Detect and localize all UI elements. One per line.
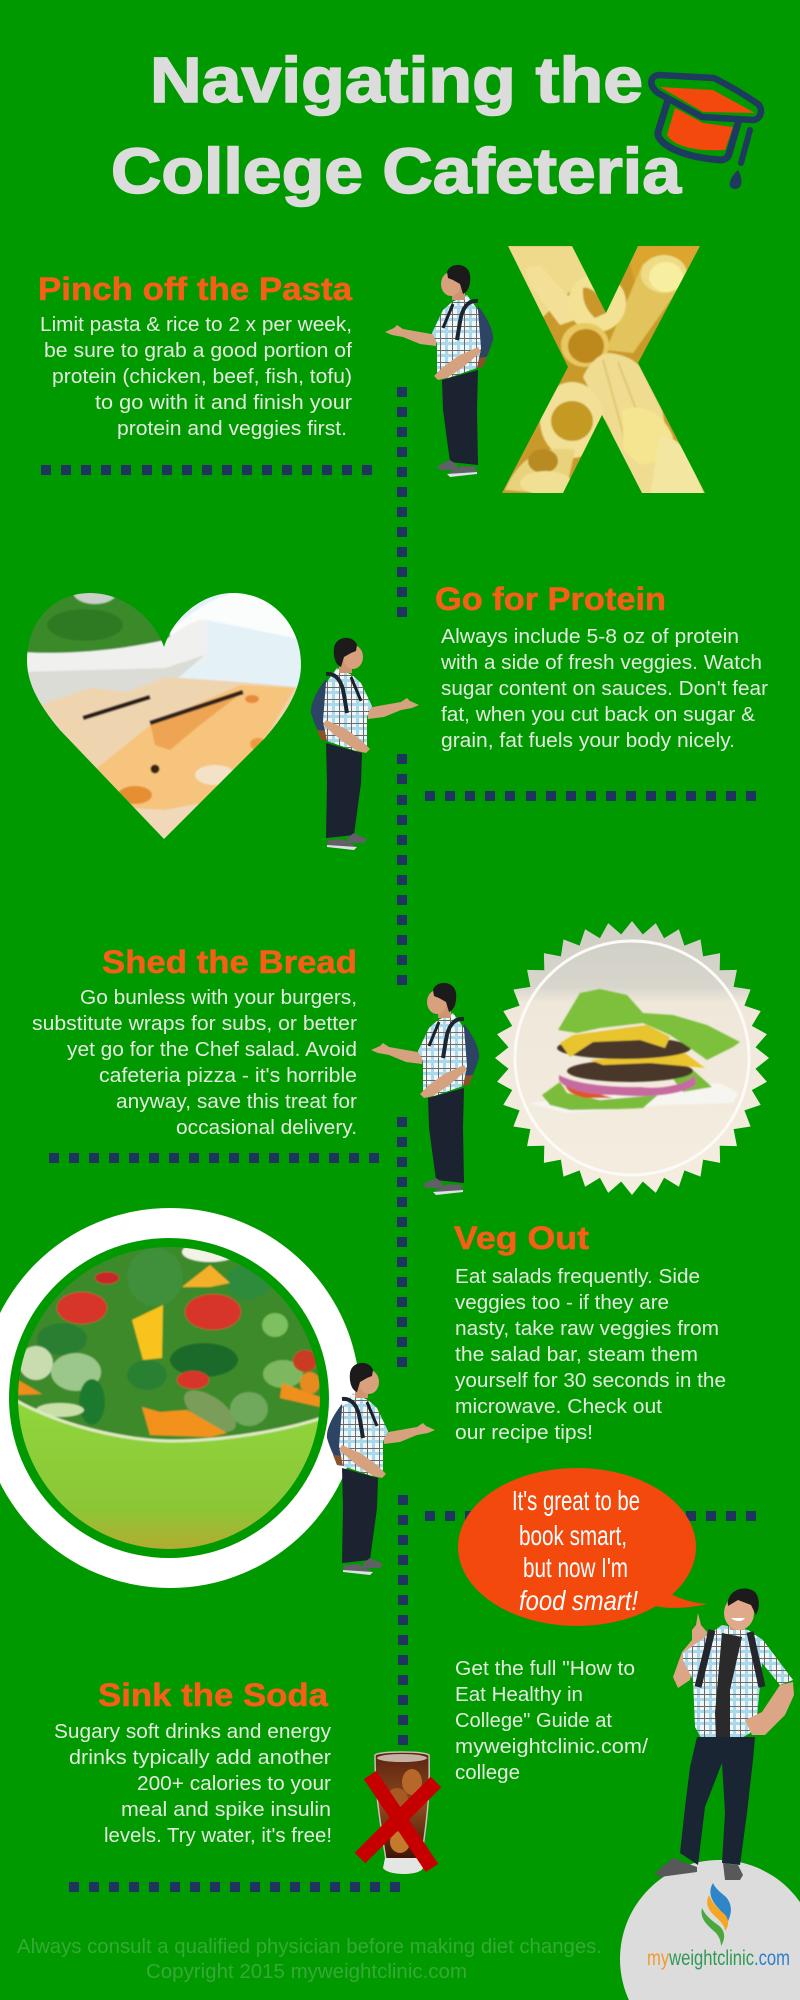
- text block: full guide link: Eat Healthy in: [455, 1684, 583, 1706]
- title: College Cafeteria: [111, 135, 681, 207]
- text block: bread advice: occasional delivery.: [176, 1117, 357, 1139]
- callout: speech bubble: [458, 1468, 707, 1626]
- figure: student pointing at pasta: [385, 265, 493, 477]
- figure: student pointing right toward protein text: [311, 638, 419, 850]
- dotted connector: third vertical: [397, 1117, 407, 1367]
- text block: veggie advice: the salad bar, steam them: [455, 1344, 698, 1366]
- footer disclaimer: Always consult a qualified physician before making diet changes.: [17, 1936, 602, 1958]
- title: Navigating the: [150, 44, 643, 116]
- text block: veggie advice: [455, 1266, 726, 1444]
- heading: Sink the Soda: Sink the Soda: [98, 1677, 328, 1713]
- photo: bunless burger in starburst: [495, 921, 769, 1195]
- callout: speech bubble: but now I'm: [523, 1552, 628, 1583]
- text block: full guide link: Get the full "How to: [455, 1658, 635, 1680]
- text block: soda advice: levels. Try water, it's free!: [104, 1825, 332, 1847]
- text block: full guide link: [455, 1658, 648, 1784]
- text block: pasta advice: Limit pasta & rice to 2 x per week,: [40, 314, 352, 336]
- heading: Go for Protein: Go for Protein: [435, 581, 666, 617]
- heading: Shed the Bread: Shed the Bread: [102, 944, 357, 980]
- text block: pasta advice: protein (chicken, beef, fish, tofu): [52, 366, 352, 388]
- text block: protein advice: Always include 5-8 oz of protein: [441, 626, 739, 648]
- text block: veggie advice: yourself for 30 seconds in the: [455, 1370, 726, 1392]
- text block: protein advice: sugar content on sauces. Don't fear: [441, 678, 768, 700]
- text block: soda advice: Sugary soft drinks and energy: [54, 1721, 331, 1743]
- text block: pasta advice: be sure to grab a good portion of: [44, 340, 352, 362]
- text block: protein advice: grain, fat fuels your body nicely.: [441, 730, 735, 752]
- text block: soda advice: [54, 1721, 332, 1847]
- text block: protein advice: [440, 626, 768, 752]
- dotted connector: fourth horizontal: [425, 1511, 756, 1521]
- logo badge: myweightclinic: [620, 1860, 800, 2000]
- text block: protein advice: fat, when you cut back on sugar &: [441, 704, 756, 726]
- text block: bread advice: substitute wraps for subs, or better: [32, 1013, 357, 1035]
- icon: crossed-out soda glass: [360, 1752, 436, 1874]
- text block: veggie advice: Eat salads frequently. Side: [455, 1266, 700, 1288]
- panel: shed the bread text: [32, 944, 357, 1139]
- text block: veggie advice: our recipe tips!: [455, 1422, 593, 1444]
- callout: speech bubble: food smart!: [519, 1585, 638, 1616]
- figure: student pointing left toward bread text: [371, 983, 479, 1195]
- figure: student pointing right toward veg text: [327, 1363, 435, 1575]
- dotted connector: second horizontal: [425, 791, 756, 801]
- text block: full guide link: college: [455, 1762, 520, 1784]
- text block: pasta advice: [40, 314, 352, 440]
- panel: pinch off the pasta text: [38, 271, 352, 440]
- text block: pasta advice: to go with it and finish your: [95, 392, 352, 414]
- callout: speech bubble: book smart,: [519, 1520, 627, 1551]
- heading: Pinch off the Pasta: Pinch off the Pasta: [38, 271, 352, 307]
- icon: graduation cap: [651, 75, 761, 189]
- text block: veggie advice: microwave. Check out: [455, 1396, 662, 1418]
- text block: veggie advice: veggies too - if they are: [455, 1292, 669, 1314]
- photo: salad bowl in white and green rings: [0, 1208, 360, 1588]
- panel: go for protein text: [435, 581, 768, 752]
- text block: veggie advice: nasty, take raw veggies from: [455, 1318, 719, 1340]
- callout: speech bubble: It's great to be: [512, 1485, 640, 1516]
- text block: soda advice: 200+ calories to your: [137, 1773, 331, 1795]
- figure: smiling student pointing up: [655, 1588, 794, 1880]
- footer disclaimer: [17, 1936, 602, 1983]
- footer disclaimer: Copyright 2015 myweightclinic.com: [146, 1961, 467, 1983]
- title: [111, 44, 681, 207]
- icon: pasta X: [502, 246, 705, 493]
- panel: veg out text: [454, 1220, 726, 1444]
- text block: bread advice: Go bunless with your burgers,: [80, 987, 357, 1009]
- dotted connector: third horizontal: [49, 1153, 379, 1163]
- text block: full guide link: myweightclinic.com/: [455, 1736, 648, 1758]
- text block: bread advice: cafeteria pizza - it's horrible: [99, 1065, 357, 1087]
- dotted connector: first horizontal: [41, 465, 372, 475]
- text block: bread advice: [32, 987, 357, 1139]
- logo badge: myweightclinic: myweightclinic.com: [647, 1947, 790, 1970]
- text block: soda advice: drinks typically add another: [69, 1747, 331, 1769]
- dotted connector: fourth vertical: [398, 1495, 408, 1745]
- text block: protein advice: with a side of fresh veggies. Watch: [440, 652, 762, 674]
- dotted connector: first vertical: [397, 387, 407, 617]
- text block: pasta advice: protein and veggies first.: [117, 418, 347, 440]
- text block: soda advice: meal and spike insulin: [121, 1799, 331, 1821]
- text block: bread advice: yet go for the Chef salad. Avoid: [67, 1039, 357, 1061]
- dotted connector: second vertical: [397, 754, 407, 985]
- dotted connector: fifth horizontal: [69, 1882, 400, 1892]
- text block: full guide link: College" Guide at: [455, 1710, 612, 1732]
- heading: Veg Out: Veg Out: [454, 1220, 589, 1256]
- panel: sink the soda text: [54, 1677, 332, 1847]
- text block: bread advice: anyway, save this treat for: [116, 1091, 357, 1113]
- photo: chicken in heart: [27, 593, 301, 839]
